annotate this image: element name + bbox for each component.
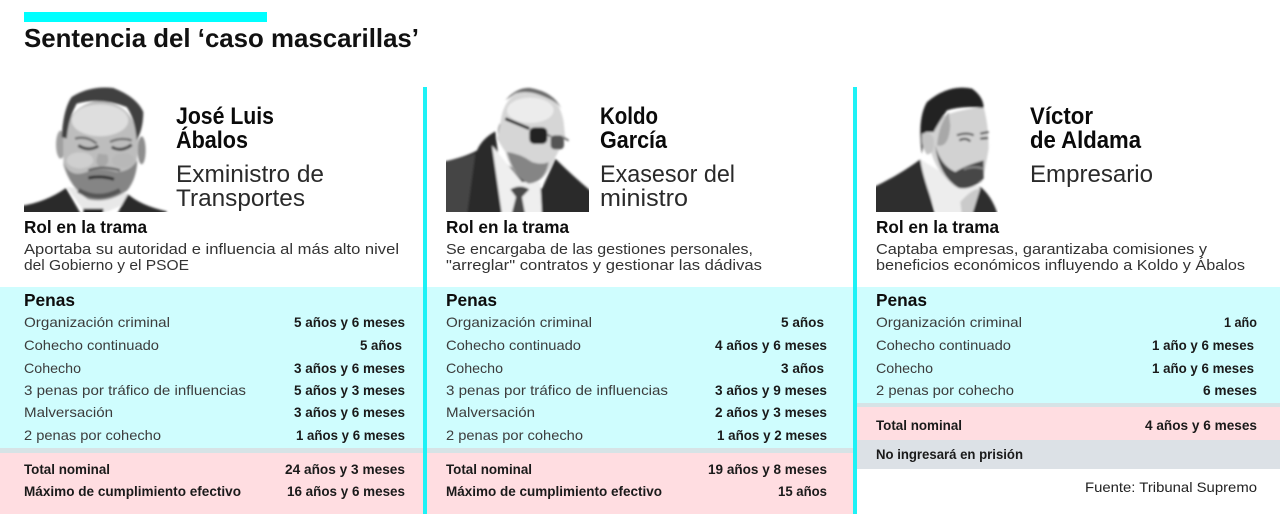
panel: Koldo García <box>427 88 853 514</box>
name <box>176 103 274 154</box>
penalties panel: Cohecho <box>24 360 81 376</box>
panel: Víctor de Aldama <box>857 88 1280 495</box>
portrait: José Luis Ábalos <box>20 88 167 215</box>
role description: beneficios económicos influyendo a Koldo y Ábalos <box>876 257 1245 274</box>
role description: "arreglar" contratos y gestionar las dádivas <box>446 257 762 274</box>
penalties panel: Cohecho <box>876 360 933 376</box>
penalties panel: 1 años y 2 meses <box>717 427 827 443</box>
totals panel: 19 años y 8 meses <box>708 461 827 477</box>
name <box>1030 103 1142 154</box>
penalties panel: 2 penas por cohecho <box>446 427 583 443</box>
penalties panel: 5 años <box>360 337 402 353</box>
role description <box>24 241 399 274</box>
penalties panel: 6 meses <box>1203 382 1257 398</box>
job title <box>176 161 324 212</box>
title: Sentencia del ‘caso mascarillas’ <box>24 23 419 53</box>
job title: ministro <box>600 185 688 212</box>
penalties panel <box>427 287 853 448</box>
penalties panel: 1 año <box>1224 314 1257 330</box>
penalties panel: 5 años <box>781 314 824 330</box>
title accent bar <box>24 12 267 22</box>
name: García <box>600 127 668 154</box>
penalties panel: 3 años <box>781 360 824 376</box>
job title <box>600 161 735 212</box>
portrait: Víctor de Aldama <box>872 88 998 215</box>
penalties panel: Cohecho continuado <box>876 337 1011 353</box>
penalties panel <box>857 287 1280 403</box>
totals panel: Total nominal <box>24 461 110 477</box>
name: José Luis <box>176 103 274 130</box>
penalties panel: Organización criminal <box>876 314 1022 330</box>
penalties panel: 3 penas por tráfico de influencias <box>446 382 668 398</box>
penalties panel: 5 años y 3 meses <box>294 382 405 398</box>
total nominal panel: 4 años y 6 meses <box>1145 417 1257 433</box>
job title: Transportes <box>176 185 305 212</box>
portrait: Koldo García <box>442 88 592 215</box>
job title: Exasesor del <box>600 161 735 188</box>
role description <box>446 241 762 274</box>
totals panel: 24 años y 3 meses <box>285 461 405 477</box>
totals panel: 15 años <box>778 483 827 499</box>
name <box>600 103 668 154</box>
penalties panel: 5 años y 6 meses <box>294 314 405 330</box>
job title: Exministro de <box>176 161 324 188</box>
prison note: No ingresará en prisión <box>876 446 1023 462</box>
penalties panel: 1 año y 6 meses <box>1152 337 1254 353</box>
role description: Captaba empresas, garantizaba comisiones y <box>876 241 1208 258</box>
penalties panel: Organización criminal <box>446 314 592 330</box>
penalties panel: 3 años y 9 meses <box>715 382 827 398</box>
column divider left <box>423 87 427 514</box>
prison note <box>857 440 1280 469</box>
penalties panel: 1 año y 6 meses <box>1152 360 1254 376</box>
name: de Aldama <box>1030 127 1142 154</box>
penalties panel <box>0 287 423 448</box>
penalties panel: 2 penas por cohecho <box>24 427 161 443</box>
name: Ábalos <box>176 126 248 154</box>
role description <box>876 241 1245 274</box>
role description: Aportaba su autoridad e influencia al más alto nivel <box>24 241 399 258</box>
name: Koldo <box>600 103 658 130</box>
penalties panel: Penas <box>446 290 497 310</box>
totals panel <box>427 448 853 514</box>
penalties panel: Penas <box>24 290 75 310</box>
totals panel <box>0 448 423 514</box>
penalties panel: 1 años y 6 meses <box>296 427 405 443</box>
role heading: Rol en la trama <box>876 217 999 237</box>
penalties panel: Malversación <box>24 404 113 420</box>
job title: Empresario <box>1030 161 1153 188</box>
role heading: Rol en la trama <box>446 217 569 237</box>
name: Víctor <box>1030 103 1093 130</box>
penalties panel: Penas <box>876 290 927 310</box>
penalties panel: 3 penas por tráfico de influencias <box>24 382 246 398</box>
column divider right <box>853 87 857 514</box>
panel: José Luis Ábalos <box>0 88 423 514</box>
total nominal panel: Total nominal <box>876 417 962 433</box>
role description: Se encargaba de las gestiones personales, <box>446 241 753 258</box>
role description: del Gobierno y el PSOE <box>24 257 189 274</box>
penalties panel: Malversación <box>446 404 535 420</box>
source: Fuente: Tribunal Supremo <box>1085 479 1257 495</box>
totals panel: Máximo de cumplimiento efectivo <box>446 483 662 499</box>
totals panel: Máximo de cumplimiento efectivo <box>24 483 241 499</box>
penalties panel: Cohecho continuado <box>24 337 159 353</box>
penalties panel: 3 años y 6 meses <box>294 404 405 420</box>
totals panel: 16 años y 6 meses <box>287 483 405 499</box>
role heading: Rol en la trama <box>24 217 147 237</box>
penalties panel: 2 penas por cohecho <box>876 382 1014 398</box>
penalties panel: 2 años y 3 meses <box>715 404 827 420</box>
penalties panel: Cohecho continuado <box>446 337 581 353</box>
totals panel: Total nominal <box>446 461 532 477</box>
penalties panel: 4 años y 6 meses <box>715 337 827 353</box>
penalties panel: Cohecho <box>446 360 503 376</box>
penalties panel: Organización criminal <box>24 314 170 330</box>
total nominal panel <box>857 403 1280 440</box>
penalties panel: 3 años y 6 meses <box>294 360 405 376</box>
